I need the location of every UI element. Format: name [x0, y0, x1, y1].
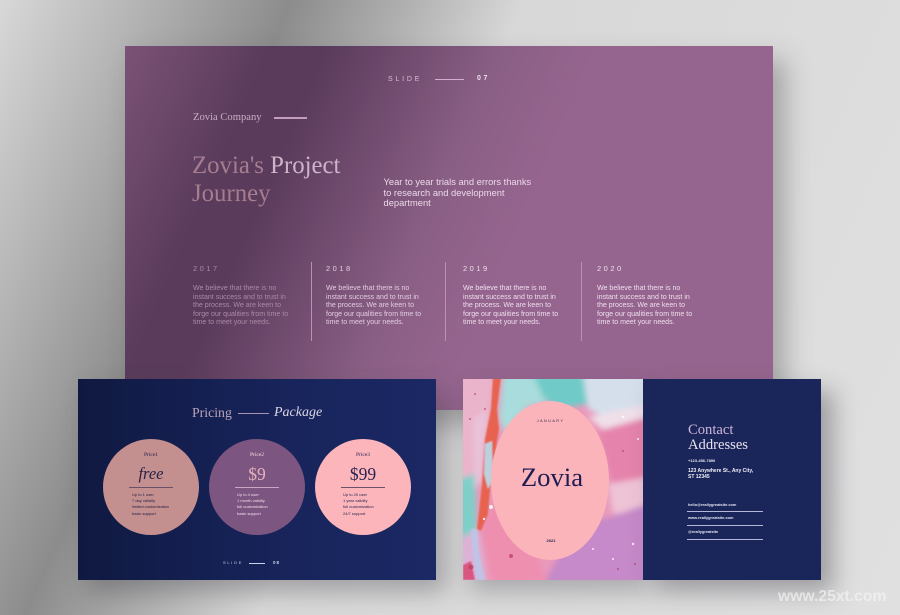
price card: $99: 24/7 support	[343, 511, 365, 516]
timeline: 2020: We believe that there is no instant success and to trust in the process. We are keen to forge our qualities from time to time to meet your needs.	[597, 285, 692, 326]
price card: $9	[209, 439, 305, 535]
slide label bottom	[223, 560, 280, 565]
phone: +123-456-7890	[688, 458, 715, 463]
slide label bottom: 08	[273, 560, 280, 565]
pricing heading: Package	[274, 405, 322, 420]
timeline: 2019: 2019	[463, 264, 490, 273]
watermark: www.25xt.com	[778, 588, 886, 605]
price card: $9: basic support	[237, 511, 261, 516]
price card: $9: $9	[248, 464, 266, 484]
title: Journey	[192, 180, 271, 206]
price card: free: basic support	[132, 511, 156, 516]
panel: pricing slide	[78, 379, 436, 580]
price card: free: limited customization	[132, 504, 169, 509]
timeline: 2017	[193, 264, 288, 326]
subtitle: Year to year trials and errors thanks	[384, 177, 531, 187]
price card: $99: 1 year validity	[343, 498, 367, 503]
timeline: 2018: 2018	[326, 264, 353, 273]
contact heading	[688, 422, 748, 453]
price card: $9: Price2	[250, 452, 264, 458]
price card: $9: Up to 4 user	[237, 492, 259, 497]
timeline: 2018	[326, 264, 421, 326]
price card: $9: 1 month validity	[237, 498, 265, 503]
contact links	[687, 502, 763, 540]
price card: $9: full customization	[237, 504, 268, 509]
price card: $99: $99	[350, 464, 376, 484]
cover year: 2021	[547, 538, 555, 543]
timeline: 2017: We believe that there is no instant success and to trust in the process. We are keen to forge our qualities from time to time to meet your needs.	[193, 285, 288, 326]
contact links: hello@reallygreatsite.com	[688, 502, 736, 507]
panel: project journey slide	[125, 46, 773, 410]
panel: cover slide with marble art	[463, 379, 643, 580]
timeline: 2020: 2020	[597, 264, 624, 273]
slide label top: 07	[477, 75, 490, 82]
price card: $99: Up to 20 user	[343, 492, 367, 497]
contact links: @reallygreatsite	[688, 529, 718, 534]
price card: free: Price1	[144, 452, 158, 458]
price card: free: free	[138, 464, 164, 483]
slide label bottom: SLIDE	[223, 560, 243, 565]
price card: free	[103, 439, 199, 535]
price card: $99: Price3	[356, 452, 370, 458]
subtitle: department	[384, 198, 431, 208]
price card: free: 7 day validity	[132, 498, 155, 503]
address: 123 Anywhere St., Any City,	[688, 468, 753, 474]
cover month: JANUARY	[537, 418, 564, 423]
timeline: 2019: We believe that there is no instant success and to trust in the process. We are keen to forge our qualities from time to time to meet your needs.	[463, 285, 558, 326]
cover title: Zovia	[521, 462, 583, 492]
slide label top	[388, 75, 490, 83]
subtitle	[384, 177, 531, 208]
slide label top: SLIDE	[388, 76, 422, 83]
panel: contact slide	[643, 379, 821, 580]
timeline: 2020	[597, 264, 692, 326]
address: ST 12345	[688, 474, 710, 480]
title	[192, 152, 340, 206]
contact links: www.reallygreatsite.com	[688, 515, 733, 520]
price card: $99: full customization	[343, 504, 374, 509]
company label: Zovia Company	[193, 112, 262, 123]
address	[688, 468, 753, 480]
subtitle: to research and development	[384, 188, 505, 198]
pricing heading: Pricing	[192, 405, 232, 420]
title: Zovia's Project	[192, 152, 340, 179]
price card: $99	[315, 439, 411, 535]
timeline: 2019	[463, 264, 558, 326]
timeline: 2017: 2017	[193, 264, 220, 273]
contact heading: Contact	[688, 422, 733, 438]
marble artwork	[463, 379, 643, 580]
price card: free: Up to 1 user	[132, 492, 154, 497]
contact heading: Addresses	[688, 437, 748, 453]
cover oval	[491, 401, 609, 560]
timeline: 2018: We believe that there is no instant success and to trust in the process. We are keen to forge our qualities from time to time to meet your needs.	[326, 285, 421, 326]
pricing heading	[192, 405, 322, 420]
